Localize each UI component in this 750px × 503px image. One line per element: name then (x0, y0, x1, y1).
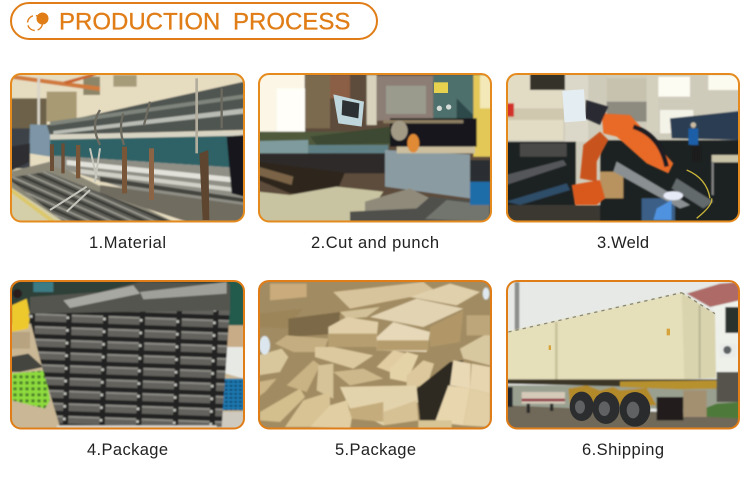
label: 6.Shipping (582, 441, 664, 459)
control monitor (333, 94, 364, 127)
photo: cutting machine (258, 73, 491, 222)
title text: PRODUCTION (59, 8, 220, 36)
trailer wheels (570, 392, 650, 427)
panel: step 1 material (10, 73, 244, 252)
photo border (259, 74, 491, 222)
photo border (507, 281, 739, 428)
photo border (259, 281, 491, 428)
photo: cardboard cartons (258, 280, 491, 429)
panel: step 2 cut and punch (258, 73, 491, 252)
photo: wrapped pallet stack (10, 280, 244, 429)
photo: welding robot (506, 73, 740, 222)
label: 1.Material (89, 234, 166, 252)
title text: PROCESS (233, 8, 350, 36)
title banner (11, 3, 377, 39)
label: 5.Package (335, 441, 416, 459)
banner pill outline (11, 3, 377, 39)
label: 4.Package (87, 441, 168, 459)
photo: container truck (506, 280, 739, 429)
label: 2.Cut and punch (311, 234, 439, 252)
label: 3.Weld (597, 234, 649, 252)
photo: stacked steel tubes (10, 73, 244, 222)
worker (688, 121, 700, 146)
photo border (11, 74, 244, 222)
panel: step 3 weld (506, 73, 740, 252)
panel: step 4 package (10, 280, 244, 459)
icon: orbit dot (28, 12, 48, 30)
panel: step 5 package (258, 280, 491, 459)
photo border (507, 74, 739, 222)
robot arm (572, 100, 683, 220)
panel: step 6 shipping (506, 280, 739, 459)
photo border (11, 281, 244, 428)
